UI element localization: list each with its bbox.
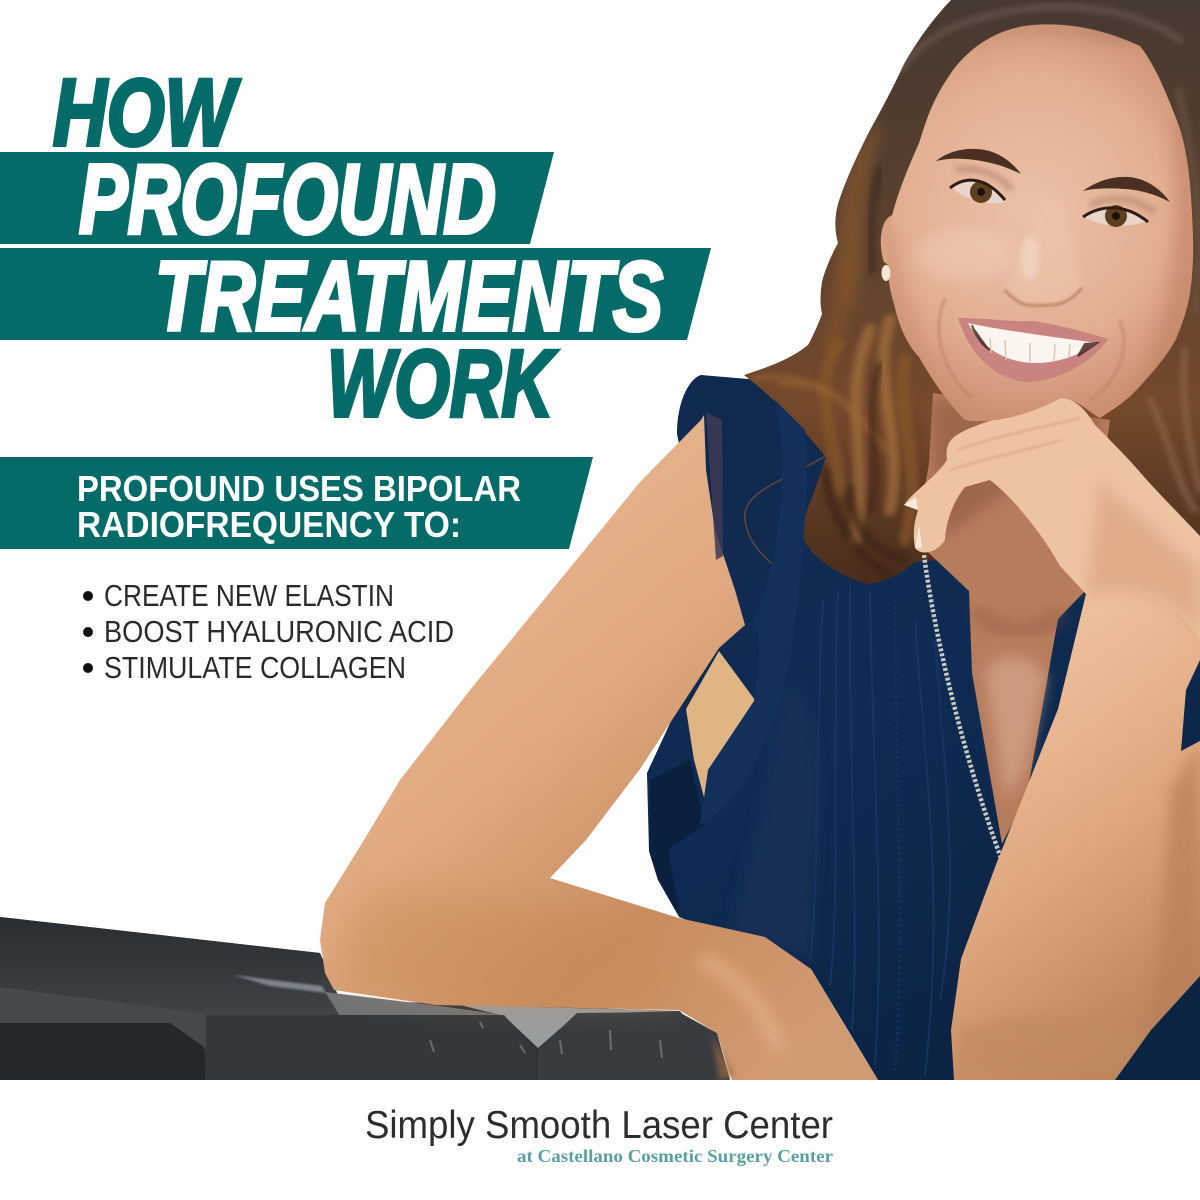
hair wisps over dress (744, 454, 827, 564)
underarm skin (686, 651, 755, 812)
ear (880, 215, 892, 264)
title word: how: HOW (53, 60, 241, 166)
title (53, 60, 663, 437)
title word: treatments: TREATMENTS (155, 241, 663, 351)
white footer (0, 1080, 1200, 1200)
hand under chin (904, 398, 1200, 640)
cheek shading (880, 25, 1200, 420)
logo: at Castellano Cosmetic Surgery Center (517, 1146, 833, 1166)
benefits list: STIMULATE COLLAGEN (104, 650, 406, 685)
eye shadow (955, 169, 1155, 212)
sheer sleeve edge (706, 412, 723, 560)
fingernail (904, 497, 922, 548)
table lit top left (325, 992, 504, 1016)
hand shading (1086, 480, 1200, 640)
face (880, 24, 1200, 421)
neck and chest (915, 393, 1110, 844)
necklace (924, 555, 1001, 858)
table left block (0, 987, 208, 1050)
logo (365, 1104, 833, 1166)
wrist shadow (710, 1038, 735, 1080)
dress pleats (810, 585, 950, 1075)
title word: work: WORK (327, 331, 558, 437)
table lit top right (460, 1005, 680, 1048)
subheading (77, 468, 521, 545)
table right front (538, 1012, 730, 1080)
smile (958, 318, 1108, 382)
title word: profound: PROFOUND (79, 144, 496, 254)
neck shadow (930, 400, 1100, 540)
table sheen (233, 975, 326, 993)
title band: profound (0, 152, 554, 244)
logo: Simply Smooth Laser Center (365, 1104, 833, 1147)
subheading: RADIOFREQUENCY TO: (77, 504, 461, 545)
table middle front (206, 1015, 536, 1080)
title band: treatments (0, 248, 711, 340)
near arm (320, 415, 878, 1080)
subheading: PROFOUND USES BIPOLAR (77, 468, 521, 509)
wrist highlight (700, 960, 780, 1050)
table paint chips (430, 1022, 662, 1058)
table left front (0, 1023, 205, 1080)
knuckle creases (950, 418, 1080, 470)
sleeve sheer fold (700, 400, 806, 825)
chest highlight (985, 656, 1045, 800)
table top surface (0, 917, 504, 1016)
benefits list: BOOST HYALURONIC ACID (104, 614, 454, 649)
elbow shade (952, 1026, 1148, 1080)
photo: woman (320, 0, 1200, 1080)
photo: table ledge (0, 917, 730, 1080)
raised arm (951, 560, 1200, 1080)
benefits list: CREATE NEW ELASTIN (104, 578, 394, 613)
dress sheer panel shading (740, 696, 812, 949)
smile lines (939, 298, 1124, 400)
table base (0, 917, 730, 1080)
dress side shadow (649, 760, 705, 915)
subheading band (0, 457, 593, 549)
eyebrows (936, 149, 1170, 202)
dress (647, 375, 1200, 1080)
benefits list (83, 578, 454, 685)
hair strands (755, 7, 1200, 575)
nose (1004, 235, 1084, 308)
hair (744, 0, 1200, 584)
earring (882, 265, 890, 281)
upper arm shade (1160, 748, 1200, 1020)
eyes (950, 169, 1155, 227)
eyelids (950, 180, 1148, 222)
neck hollow shading (975, 610, 1060, 631)
arm elbow shading (340, 892, 680, 1005)
